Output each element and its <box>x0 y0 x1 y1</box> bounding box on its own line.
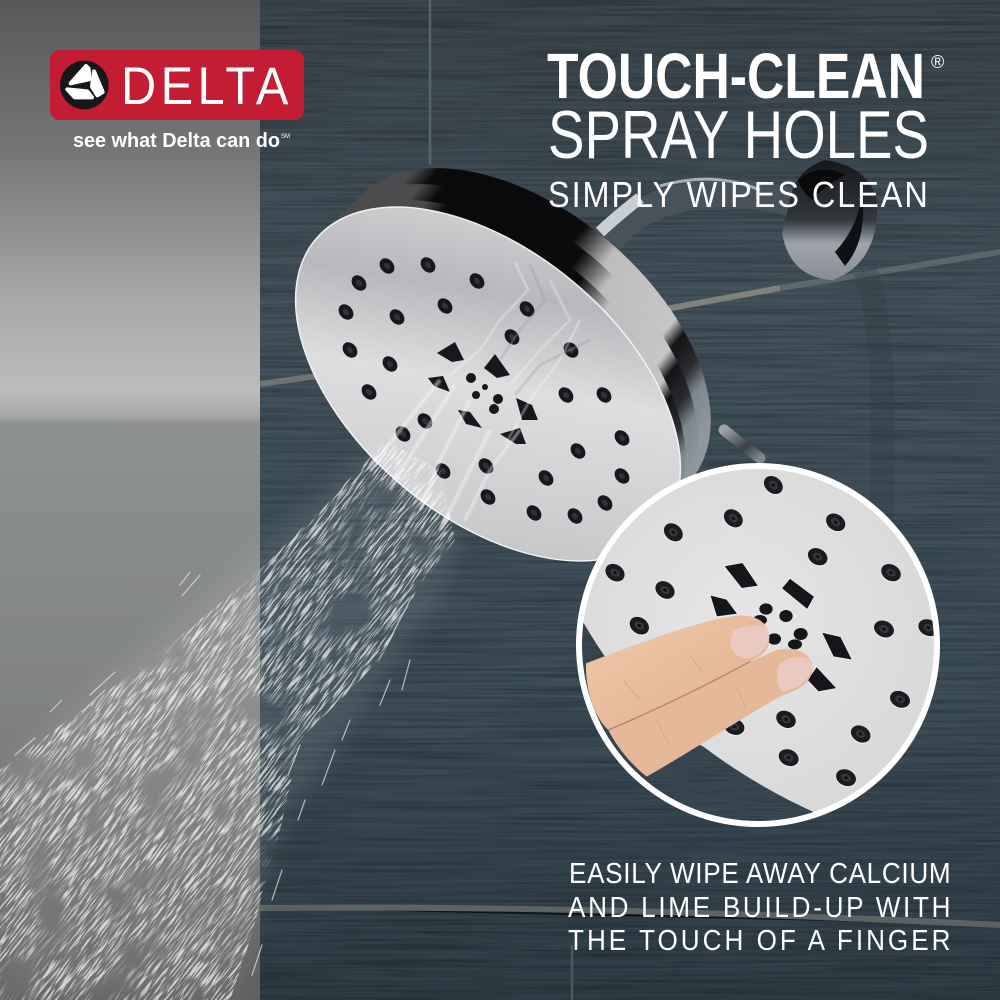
inset circle: finger wiping spray holes <box>579 466 942 824</box>
head rim <box>237 100 775 622</box>
service mark: SM <box>281 134 290 140</box>
water spray <box>0 440 460 1000</box>
Delta logo <box>50 50 304 152</box>
inset diamond nozzles <box>710 563 852 692</box>
stray droplets outside spray body <box>15 572 410 975</box>
title: Touch-Clean Spray Holes: ® <box>931 52 944 72</box>
description text: THE TOUCH OF A FINGER <box>568 924 951 956</box>
centre diamond nozzles <box>428 342 538 444</box>
title: Touch-Clean Spray Holes <box>547 40 944 173</box>
inset chrome face <box>580 467 937 813</box>
inset round holes <box>601 472 942 790</box>
left wall background <box>0 0 261 1000</box>
inset centre holes <box>753 603 808 649</box>
side knob <box>724 430 760 458</box>
tiled shower wall <box>260 0 1000 1000</box>
spray holes on face <box>336 254 632 527</box>
shower arm and wall flange <box>600 160 877 280</box>
description text: EASILY WIPE AWAY CALCIUM <box>569 857 951 889</box>
water sheet on face <box>370 262 590 530</box>
red badge <box>50 50 304 120</box>
description text: AND LIME BUILD-UP WITH <box>568 891 951 923</box>
shower head <box>230 100 775 631</box>
fingers <box>586 615 813 777</box>
inset wall streaks <box>582 624 812 820</box>
head face <box>230 137 746 631</box>
tagline: see what Delta can do <box>73 130 280 152</box>
DELTA wordmark: DELTA <box>121 56 288 115</box>
subtitle: SIMPLY WIPES CLEAN <box>548 175 928 215</box>
description text <box>568 857 951 956</box>
icon: Delta triangle mark <box>60 61 109 109</box>
